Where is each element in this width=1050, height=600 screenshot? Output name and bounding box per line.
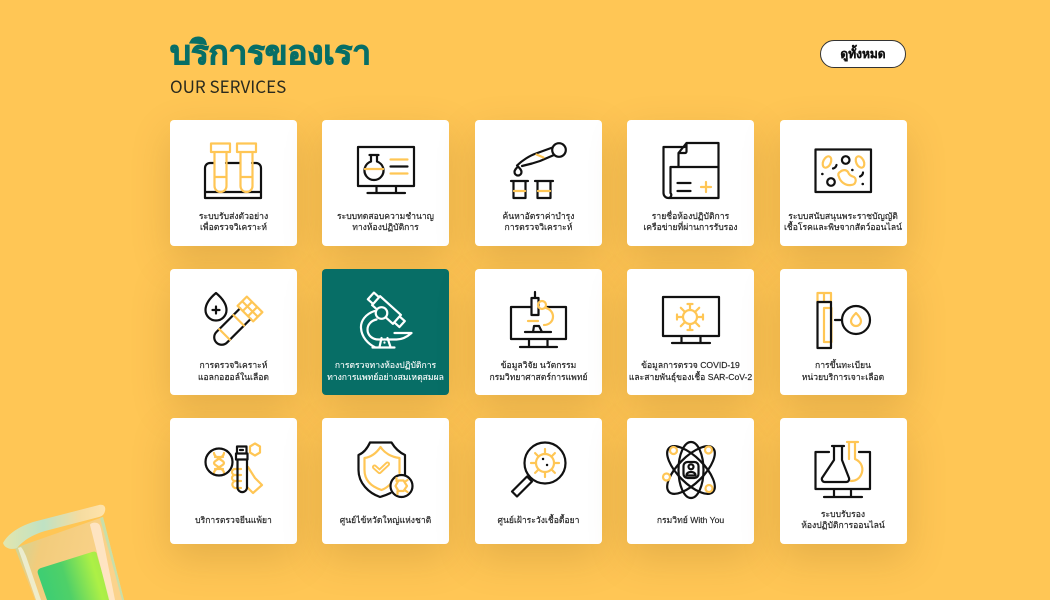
label: การตรวจวิเคราะห์ [505, 222, 572, 232]
label: แอลกอฮอล์ในเลือด [198, 372, 269, 382]
icon: folder with document [662, 142, 720, 200]
label: ศูนย์เฝ้าระวังเชื้อดื้อยา [498, 515, 579, 525]
label: ข้อมูลวิจัย นวัตกรรม [501, 360, 576, 370]
icon: DNA lens and tube in hand [204, 442, 264, 494]
label [489, 360, 588, 382]
card: COVID-19 data [627, 269, 754, 395]
label: ทางห้องปฏิบัติการ [352, 222, 419, 232]
label: การตรวจทางห้องปฏิบัติการ [335, 360, 436, 370]
label: กรมวิทยาศาสตร์การแพทย์ [489, 372, 588, 382]
title: บริการของเรา [170, 34, 371, 71]
card: blood collection registration [780, 269, 906, 395]
label [199, 210, 268, 232]
button: view all [820, 40, 906, 68]
label: ค้นหาอัตราค่าบำรุง [503, 210, 574, 220]
label: ข้อมูลการตรวจ COVID-19 [641, 360, 740, 370]
label: ทางการแพทย์อย่างสมเหตุสมผล [327, 372, 444, 382]
card: pathogen act system [780, 120, 906, 246]
icon: magnifier with germ [510, 441, 567, 498]
card: research data [475, 269, 602, 395]
label [643, 210, 738, 232]
label: การตรวจวิเคราะห์ [200, 360, 267, 370]
label: เพื่อตรวจวิเคราะห์ [200, 222, 267, 232]
label: ระบบทดสอบความชำนาญ [337, 210, 434, 220]
label [784, 210, 902, 232]
icon: blood drop and test tube [204, 292, 264, 346]
icon: shield with virus [357, 441, 414, 498]
card: fee search [475, 120, 602, 246]
label: หน่วยบริการเจาะเลือด [802, 372, 884, 382]
label [337, 210, 434, 232]
icon: slide with microbes [814, 148, 872, 194]
card: sample submission [170, 120, 297, 246]
icon: monitor with microscope [510, 290, 568, 348]
icon: dropper and beakers [510, 142, 567, 200]
icon: monitor with flasks [814, 440, 872, 498]
label: ระบบรับส่งตัวอย่าง [199, 210, 268, 220]
card: DMSc With You [627, 418, 754, 544]
label: เครือข่ายที่ผ่านการรับรอง [643, 222, 738, 232]
icon: monitor with virus [662, 296, 720, 344]
label: เชื้อโรคและพิษจากสัตว์ออนไลน์ [784, 222, 902, 232]
label [198, 360, 269, 382]
card: national influenza center [322, 418, 449, 544]
label [503, 210, 574, 232]
card: proficiency testing [322, 120, 449, 246]
label: การขึ้นทะเบียน [815, 360, 871, 370]
button: view all: ดูทั้งหมด [840, 47, 886, 61]
label: กรมวิทย์ With You [657, 515, 724, 525]
card: network labs [627, 120, 754, 246]
label: ศูนย์ไข้หวัดใหญ่แห่งชาติ [340, 515, 431, 525]
label: รายชื่อห้องปฏิบัติการ [652, 210, 729, 220]
card: pharmacogenetics [170, 418, 297, 544]
label [801, 508, 885, 530]
card: AMR surveillance [475, 418, 602, 544]
label: บริการตรวจยีนแพ้ยา [195, 515, 272, 525]
label: และสายพันธุ์ของเชื้อ SAR-CoV-2 [629, 372, 752, 382]
label: ระบบรับรอง [821, 508, 865, 518]
label [802, 358, 884, 382]
icon: tube and blood drop [816, 292, 872, 350]
illustration: green test tube [3, 504, 124, 600]
label [327, 360, 444, 382]
card: rational lab use (active) [322, 269, 449, 395]
label: ห้องปฏิบัติการออนไลน์ [801, 520, 885, 530]
icon: test tubes in rack [204, 142, 262, 200]
icon: atom with person [662, 440, 716, 500]
icon: microscope [360, 292, 413, 349]
card: blood alcohol [170, 269, 297, 395]
icon: monitor with flask [356, 146, 416, 194]
label [629, 360, 752, 382]
label: ระบบสนับสนุนพระราชบัญญัติ [788, 210, 898, 220]
card: online lab accreditation [780, 418, 906, 544]
subtitle: OUR SERVICES [170, 73, 286, 98]
